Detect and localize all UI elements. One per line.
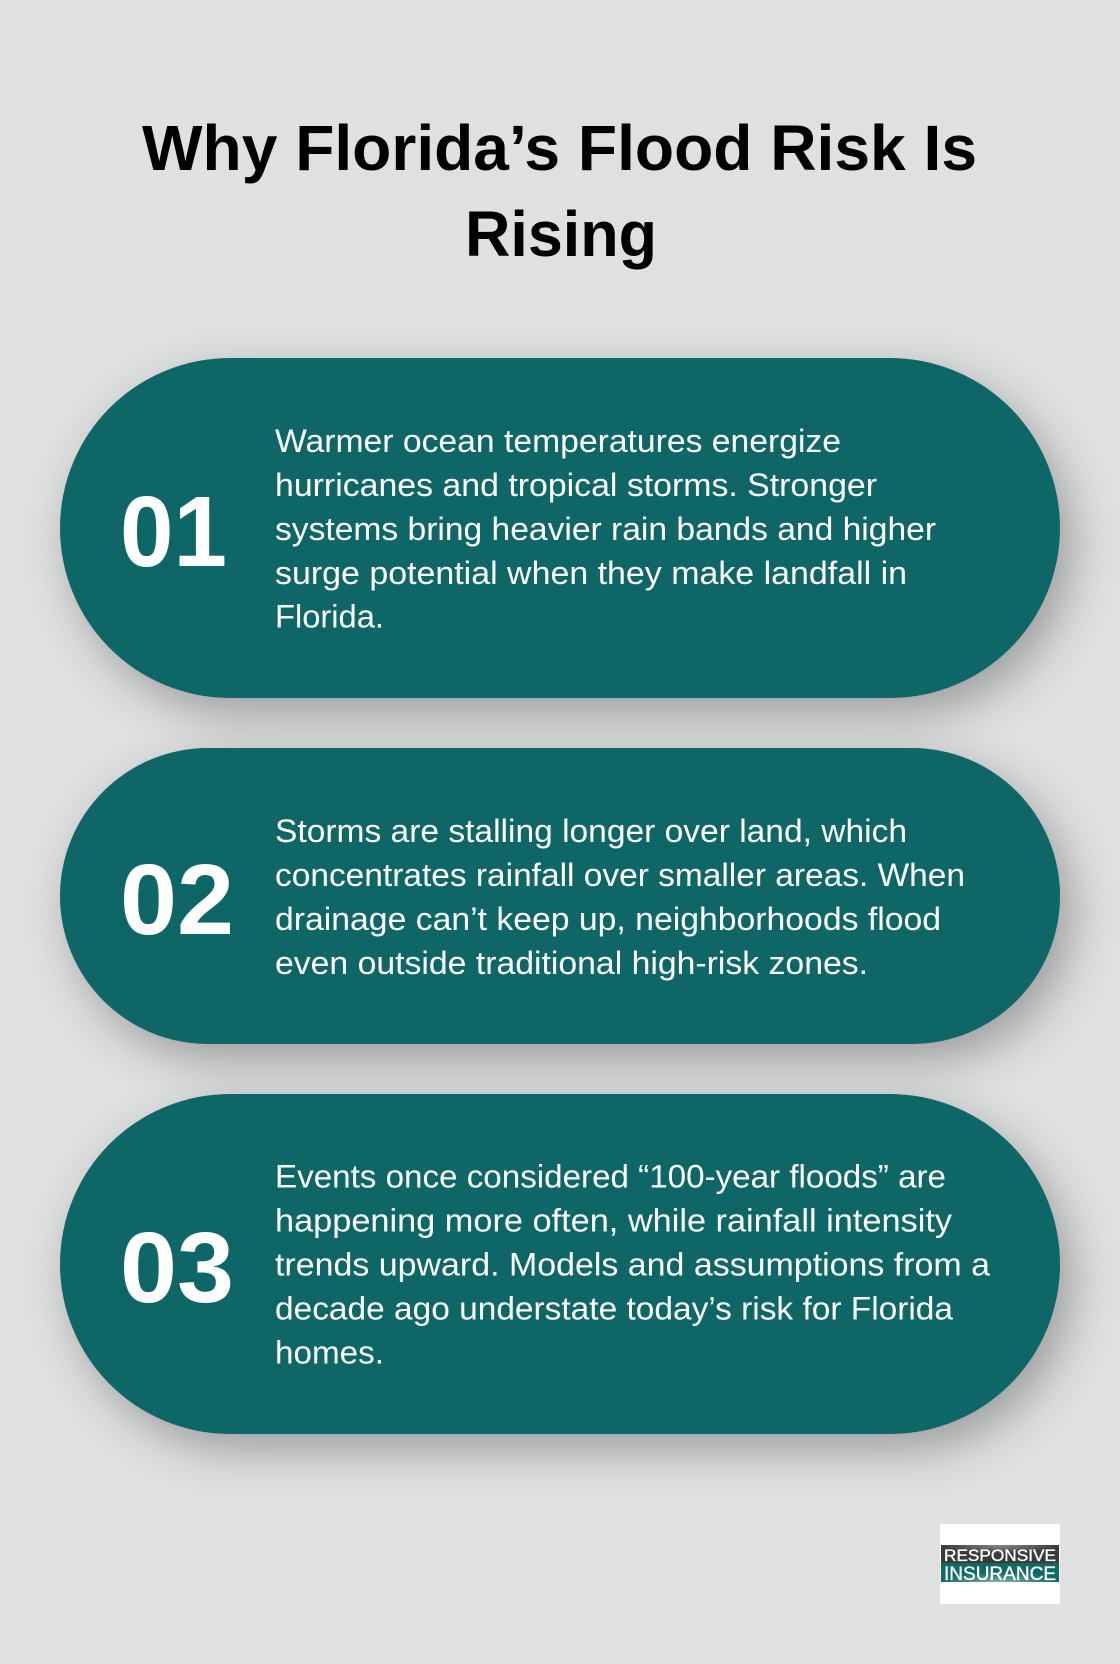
text block: stalling storms: drainage can’t keep up, neighborhoods flood (275, 901, 941, 937)
text block: warmer oceans (275, 423, 936, 634)
number 02: 02 (120, 844, 234, 956)
title: Rising (465, 198, 657, 270)
text block: outdated risk models: happening more often, while rainfall intensity (275, 1202, 952, 1238)
panel: warmer oceans (60, 358, 1060, 698)
text block: warmer oceans: Warmer ocean temperatures energize (275, 423, 841, 459)
logo: Responsive Insurance: INSURANCE (944, 1564, 1056, 1585)
text block: stalling storms: even outside traditional high-risk zones. (275, 945, 868, 981)
text block: warmer oceans: surge potential when they make landfall in (275, 555, 907, 591)
title (142, 112, 977, 270)
text block: warmer oceans: systems bring heavier rain bands and higher (275, 511, 936, 547)
text block: warmer oceans: hurricanes and tropical storms. Stronger (275, 467, 877, 503)
logo: Responsive Insurance: RESPONSIVE (944, 1547, 1056, 1565)
text block: stalling storms: concentrates rainfall over smaller areas. When (275, 857, 965, 893)
title: Why Florida’s Flood Risk Is (142, 112, 977, 184)
text block: outdated risk models: Events once considered “100-year floods” are (275, 1158, 946, 1194)
text block: outdated risk models: trends upward. Models and assumptions from a (275, 1246, 990, 1282)
logo: Responsive Insurance (940, 1524, 1060, 1604)
number 03: 03 (120, 1212, 234, 1324)
text block: outdated risk models (275, 1158, 990, 1370)
text block: outdated risk models: homes. (275, 1334, 384, 1370)
number 01: 01 (120, 476, 227, 588)
panel: stalling storms (60, 748, 1060, 1044)
text block: warmer oceans: Florida. (275, 598, 384, 634)
text block: stalling storms (275, 813, 965, 981)
panel: outdated risk models (60, 1094, 1060, 1434)
text block: stalling storms: Storms are stalling longer over land, which (275, 813, 907, 849)
text block: outdated risk models: decade ago understate today’s risk for Florida (275, 1290, 953, 1326)
